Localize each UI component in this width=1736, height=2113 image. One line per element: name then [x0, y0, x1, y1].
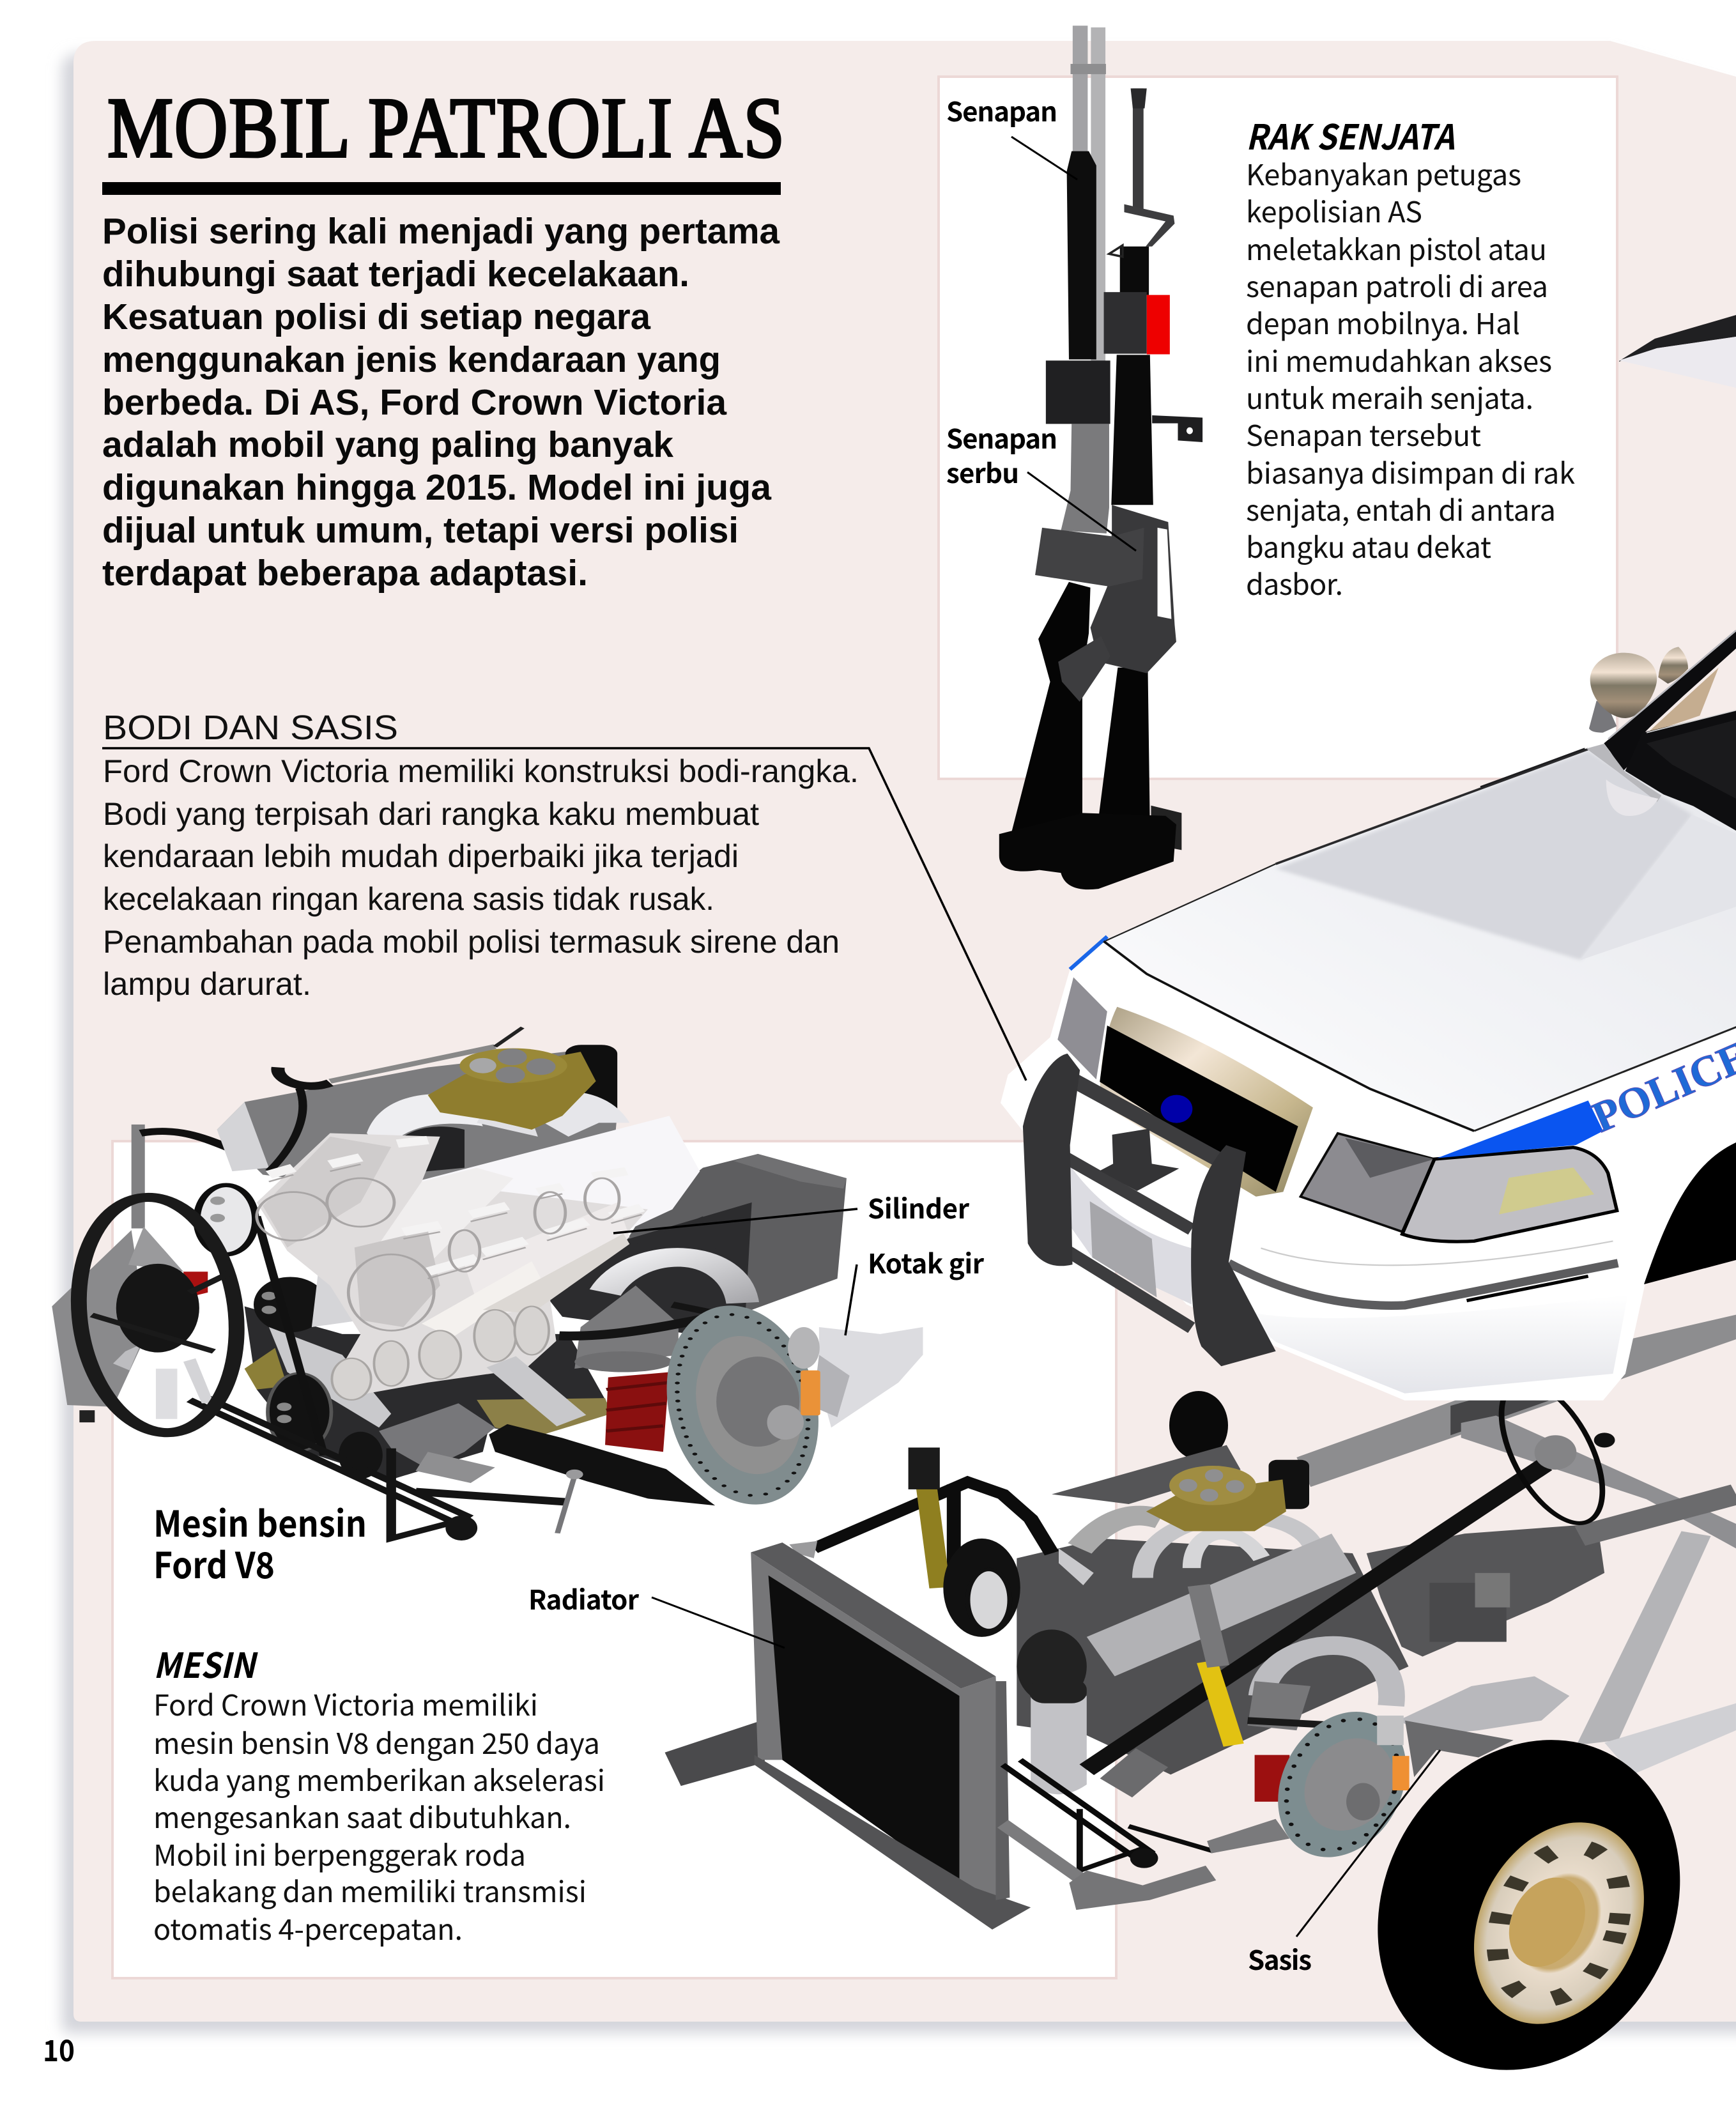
- panel: mesin box: [112, 1141, 1116, 1978]
- right headlight: [1301, 1133, 1617, 1241]
- roof sliver: [1619, 315, 1736, 362]
- text block: bodi dan sasis: [103, 753, 859, 1002]
- roof highlight: [1619, 337, 1736, 388]
- intake manifold gold: [428, 1049, 596, 1130]
- text block: rak senjata: Senapan tersebut: [1246, 413, 1481, 454]
- label: silinder: Silinder: [868, 1188, 970, 1227]
- front wheel: [1346, 1725, 1712, 2086]
- text block: rak senjata: dasbor.: [1246, 562, 1343, 603]
- label: mesin bensin ford v8: [153, 1496, 367, 1589]
- heading: bodi dan sasis: BODI DAN SASIS: [103, 709, 398, 747]
- text block: bodi dan sasis: kecelakaan ringan karena sasis tidak rusak.: [103, 881, 714, 917]
- text block: introduction: Polisi sering kali menjadi yang pertama: [102, 211, 780, 252]
- grille: [1100, 1007, 1313, 1197]
- translucent pistons: [257, 1133, 648, 1400]
- label: silinder: [613, 1188, 970, 1233]
- illustration: gun rack: [999, 26, 1202, 889]
- text block: mesin: Ford Crown Victoria memiliki: [153, 1682, 538, 1724]
- title: MOBIL PATROLI AS: [107, 81, 785, 176]
- fan: [69, 1195, 247, 1435]
- text block: rak senjata: meletakkan pistol atau: [1246, 227, 1547, 268]
- brake disc: [653, 1302, 833, 1508]
- text block: rak senjata: senapan patroli di area: [1246, 264, 1548, 305]
- text block: introduction: terdapat beberapa adaptasi.: [102, 553, 588, 594]
- label: sasis: [1248, 1750, 1440, 1978]
- text block: introduction: berbeda. Di AS, Ford Crown Victoria: [102, 382, 727, 423]
- label: senapan: Senapan: [946, 91, 1057, 130]
- left headlight: [1057, 978, 1107, 1079]
- text block: mesin: [153, 1638, 605, 1948]
- text block: rak senjata: depan mobilnya. Hal: [1246, 301, 1520, 342]
- text block: rak senjata: Kebanyakan petugas: [1246, 152, 1521, 194]
- text block: bodi dan sasis: Penambahan pada mobil polisi termasuk sirene dan: [103, 924, 840, 960]
- label: kotak gir: [845, 1243, 985, 1335]
- text block: rak senjata: untuk meraih senjata.: [1246, 376, 1533, 417]
- title rule: [102, 182, 781, 195]
- illustration: chassis with engine: [665, 1315, 1736, 2086]
- label: senapan: [946, 91, 1077, 180]
- text block: rak senjata: bangku atau dekat: [1246, 525, 1491, 566]
- blue stripe: [1437, 1100, 1603, 1158]
- heading: rak senjata: RAK SENJATA: [1246, 109, 1454, 160]
- label: radiator: [528, 1579, 785, 1648]
- page number: 10: [43, 2028, 75, 2070]
- panel: rak senjata box: [939, 77, 1617, 779]
- text block: bodi dan sasis: kendaraan lebih mudah diperbaiki jika terjadi: [103, 838, 739, 874]
- wheel arch: [1644, 1142, 1736, 1284]
- leader line: bodi dan sasis: [102, 748, 1026, 1080]
- label: kotak gir: Kotak gir: [868, 1243, 985, 1282]
- text block: introduction: digunakan hingga 2015. Model ini juga: [102, 467, 772, 508]
- lower engine mass: [245, 1307, 611, 1480]
- text block: rak senjata: senjata, entah di antara: [1246, 488, 1556, 529]
- illustration: mirrors and windshield: [1480, 631, 1736, 831]
- text block: introduction: Kesatuan polisi di setiap negara: [102, 296, 651, 337]
- text block: mesin: mengesankan saat dibutuhkan.: [153, 1795, 571, 1836]
- text block: mesin: Mobil ini berpenggerak roda: [153, 1833, 526, 1874]
- heading: mesin: MESIN: [153, 1638, 258, 1688]
- label: senapan serbu: Senapan: [946, 418, 1057, 457]
- text block: rak senjata: ini memudahkan akses: [1246, 339, 1552, 380]
- text block: rak senjata: biasanya disimpan di rak: [1246, 450, 1575, 492]
- text block: bodi dan sasis: Ford Crown Victoria memiliki konstruksi bodi-rangka.: [103, 753, 859, 789]
- label: mesin bensin ford v8: Mesin bensin: [153, 1496, 367, 1548]
- push bar: [1023, 1054, 1276, 1366]
- text block: mesin: kuda yang memberikan akselerasi: [153, 1758, 605, 1799]
- label: sasis: Sasis: [1248, 1939, 1312, 1978]
- text block: rak senjata: [1246, 109, 1575, 603]
- text block: mesin: mesin bensin V8 dengan 250 daya: [153, 1721, 600, 1762]
- text block: mesin: belakang dan memiliki transmisi: [153, 1869, 587, 1910]
- text block: introduction: adalah mobil yang paling banyak: [102, 424, 673, 465]
- text block: introduction: menggunakan jenis kendaraan yang: [102, 339, 721, 380]
- illustration: police car body: [1001, 749, 1736, 1401]
- text block: rak senjata: kepolisian AS: [1246, 189, 1422, 231]
- illustration: v8 engine cutaway: [52, 1027, 923, 1541]
- text block: introduction: dijual untuk umum, tetapi versi polisi: [102, 510, 739, 551]
- text block: introduction: [102, 211, 780, 594]
- text block: introduction: dihubungi saat terjadi kecelakaan.: [102, 254, 689, 295]
- text block: bodi dan sasis: lampu darurat.: [103, 966, 311, 1002]
- label: senapan serbu: [946, 418, 1136, 551]
- label: mesin bensin ford v8: Ford V8: [153, 1537, 275, 1589]
- label: senapan serbu: serbu: [946, 452, 1019, 491]
- label: radiator: Radiator: [528, 1579, 640, 1618]
- text block: bodi dan sasis: Bodi yang terpisah dari rangka kaku membuat: [103, 796, 759, 832]
- text block: mesin: otomatis 4-percepatan.: [153, 1907, 463, 1948]
- radiator: [665, 1542, 1031, 1930]
